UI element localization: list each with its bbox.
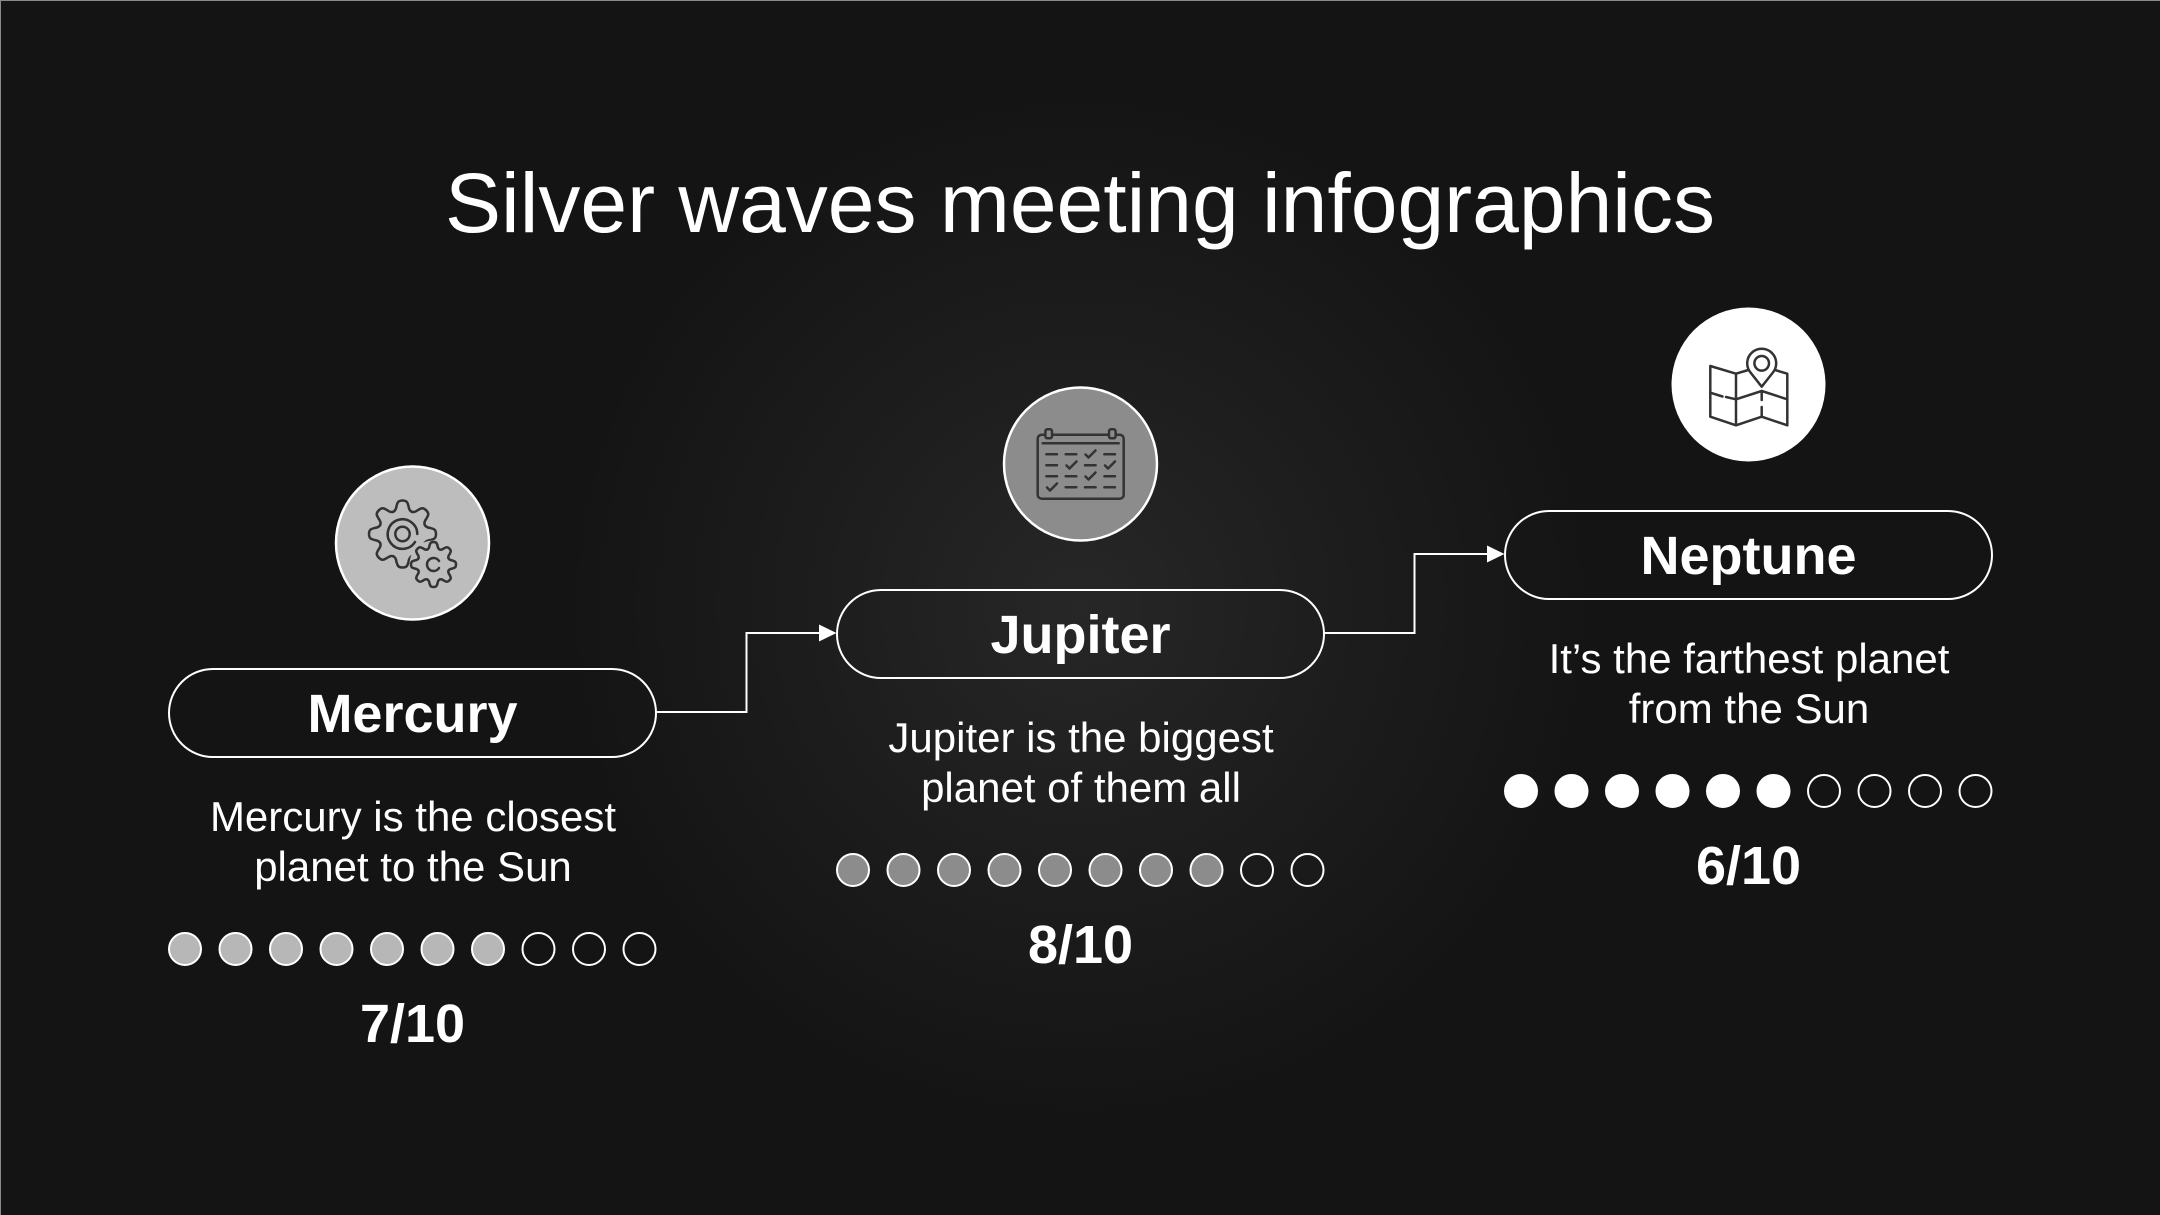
description: Mercury: planet to the Sun (254, 843, 572, 890)
rating dots: Mercury 7 of 10 (169, 933, 656, 965)
score: Neptune: 6/10 (1696, 836, 1801, 896)
name: Jupiter: Jupiter (990, 605, 1171, 665)
icon: gears (336, 466, 489, 620)
name: Mercury: Mercury (307, 684, 518, 744)
panel: Neptune (1505, 308, 1992, 896)
arrow: Mercury to Jupiter (656, 624, 836, 712)
description: Jupiter: planet of them all (921, 764, 1241, 811)
title: Silver waves meeting infographics (445, 156, 1715, 250)
score: Mercury: 7/10 (360, 994, 465, 1054)
panel: Mercury (169, 466, 656, 1054)
pill: Neptune (1505, 511, 1992, 599)
rating dots: Neptune 6 of 10 (1505, 775, 1992, 807)
arrow: Jupiter to Neptune (1324, 546, 1504, 633)
description: Neptune: It’s the farthest planet (1549, 635, 1950, 682)
rating dots: Jupiter 8 of 10 (837, 854, 1324, 886)
icon: map with pin (1672, 308, 1826, 462)
panel: Jupiter (837, 388, 1324, 975)
pill: Mercury (169, 669, 656, 757)
description: Neptune: from the Sun (1629, 685, 1869, 732)
score: Jupiter: 8/10 (1028, 915, 1133, 975)
description: Mercury: Mercury is the closest (210, 793, 616, 840)
description: Jupiter: Jupiter is the biggest (888, 714, 1274, 761)
pill: Jupiter (837, 590, 1324, 678)
name: Neptune: Neptune (1640, 526, 1856, 586)
icon: calendar (1004, 388, 1157, 540)
